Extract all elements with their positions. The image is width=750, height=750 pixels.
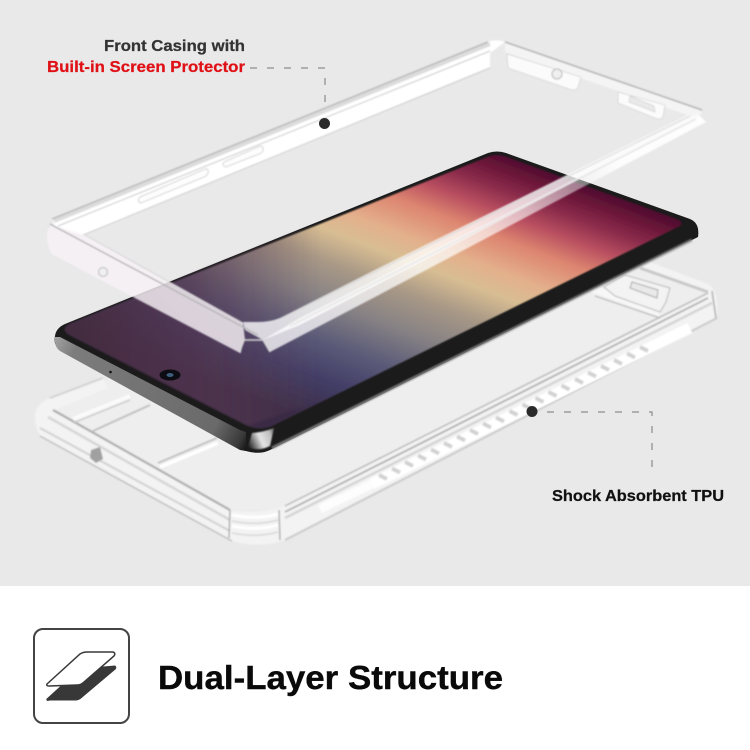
front casing: tab with hole xyxy=(507,54,581,90)
label line: built-in screen protector: Built-in Screen Protector xyxy=(47,59,245,76)
microphone hole xyxy=(109,371,112,373)
front casing: charging port hole xyxy=(98,268,108,276)
back case: shock absorbent TPU xyxy=(35,262,718,545)
front casing: volume button cutouts xyxy=(138,146,263,203)
back case: interior rails xyxy=(73,396,130,419)
phone side and bezel xyxy=(55,152,698,453)
back case: clear interior xyxy=(53,268,708,510)
back case: white rib strip with grey ticks xyxy=(320,328,690,509)
phone corner highlight xyxy=(248,428,274,449)
front casing: near long band, lower frosted half xyxy=(263,116,706,352)
screen left purple tint xyxy=(65,222,320,426)
callout: TPU label xyxy=(526,406,724,505)
back case: bottom corner xyxy=(232,514,278,528)
back case: near left band lines xyxy=(53,410,230,510)
dashed leader line xyxy=(250,68,325,108)
back case: outer band body xyxy=(35,262,718,545)
grey product background panel xyxy=(0,0,750,586)
back case: side button bump xyxy=(90,447,103,463)
front casing: left short band xyxy=(47,223,245,353)
front casing with screen protector xyxy=(47,40,706,353)
back case: near right band lines xyxy=(285,293,708,506)
front casing: near long band, upper clear half xyxy=(243,113,700,340)
label line: front casing: Front Casing with xyxy=(104,38,245,55)
phone bottom side face xyxy=(55,337,246,451)
back case: top-right cutout tab and rail xyxy=(593,275,670,318)
marker dot xyxy=(319,118,330,129)
smartphone xyxy=(55,152,698,453)
phone lower edge reflection xyxy=(272,240,692,448)
front casing: far long band xyxy=(52,40,505,235)
front casing: camera hole on tab xyxy=(552,69,562,79)
dashed leader line xyxy=(547,412,652,472)
marker dot xyxy=(526,406,538,417)
front casing: rectangular tab xyxy=(618,92,665,119)
front casing: far short band xyxy=(505,42,702,116)
feature icon: layers xyxy=(34,629,129,723)
callout: front casing label xyxy=(47,38,330,129)
front casing: notch edges xyxy=(240,340,270,353)
front camera xyxy=(160,370,180,380)
label text: Shock Absorbent TPU xyxy=(552,488,724,505)
feature title: Dual-Layer Structure xyxy=(158,659,503,696)
phone screen xyxy=(65,155,681,428)
